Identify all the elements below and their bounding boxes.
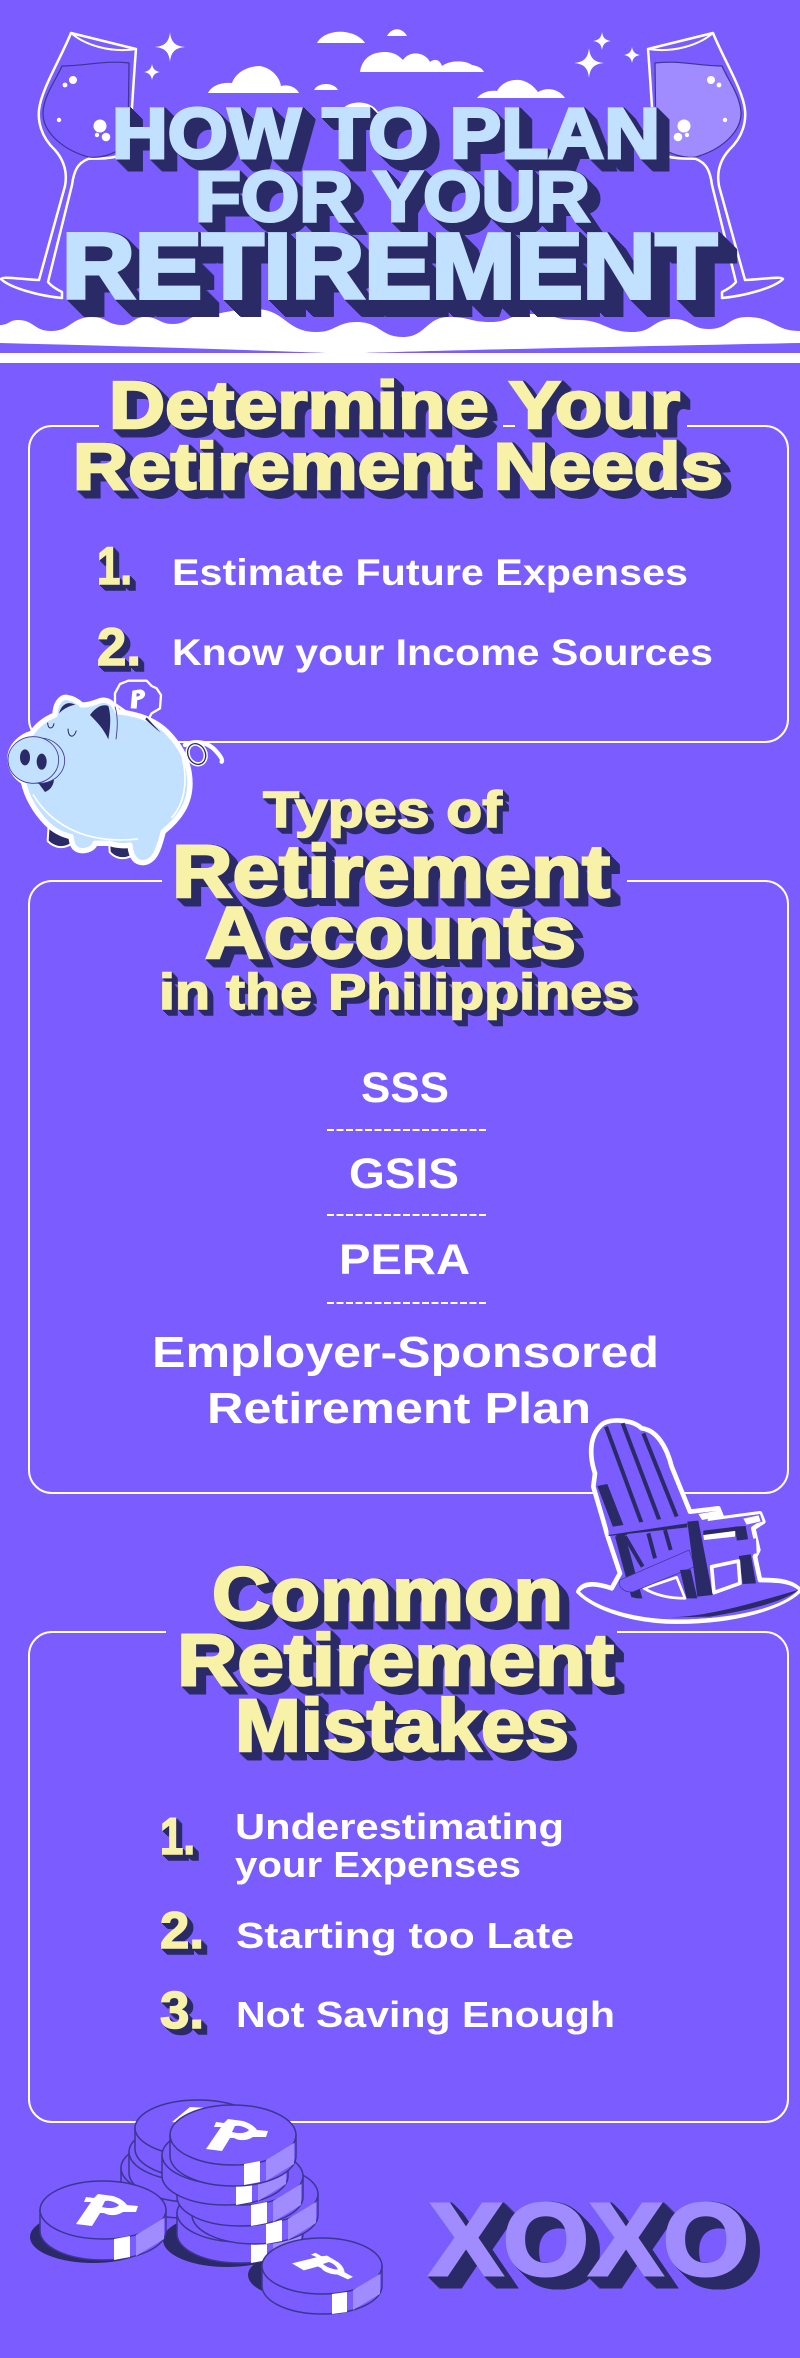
panel outline xyxy=(29,1632,788,2122)
heading xyxy=(159,781,634,1020)
list: account types: Retirement Plan xyxy=(207,1384,591,1433)
item 1 xyxy=(97,537,688,596)
icon: clouds xyxy=(208,29,565,116)
item 2 xyxy=(97,618,713,677)
icon: peso coin pile xyxy=(30,2100,382,2314)
panel: types of retirement accounts xyxy=(29,781,788,1493)
heading: Retirement xyxy=(177,1620,614,1701)
title: FOR YOUR xyxy=(195,158,590,237)
item 1 xyxy=(160,1806,564,1885)
heading: in the Philippines xyxy=(159,964,634,1020)
title: RETIREMENT xyxy=(62,214,717,318)
item 2: Starting too Late xyxy=(236,1915,574,1956)
title xyxy=(62,95,717,318)
list: account types: GSIS xyxy=(349,1150,459,1198)
heading: Common xyxy=(212,1552,563,1636)
list: account types: SSS xyxy=(361,1064,449,1112)
stacked coins xyxy=(177,2184,303,2263)
xoxo sign-off: XOXO xyxy=(429,2182,749,2297)
item 3 xyxy=(160,1982,615,2040)
item 1: 1. xyxy=(160,1808,195,1866)
top coin xyxy=(170,2105,296,2186)
icon: piggy bank xyxy=(8,681,222,863)
panel: common retirement mistakes xyxy=(29,1552,788,2122)
icon: rocking chair xyxy=(578,1421,800,1622)
heading xyxy=(73,368,723,503)
heading: Mistakes xyxy=(235,1684,569,1767)
heading xyxy=(177,1552,614,1767)
panel: determine your retirement needs xyxy=(29,368,788,742)
item 1: 1. xyxy=(97,537,132,596)
item 1: Underestimating xyxy=(235,1806,564,1847)
list: account types xyxy=(152,1064,659,1433)
list: account types: Employer-Sponsored xyxy=(152,1328,659,1377)
item 2 xyxy=(160,1902,574,1960)
front coin xyxy=(262,2238,382,2314)
heading: Accounts xyxy=(205,893,576,974)
item 3: 3. xyxy=(160,1982,204,2040)
panel outline xyxy=(29,881,788,1493)
item 2: 2. xyxy=(160,1902,204,1960)
heading: Types of xyxy=(263,781,503,838)
left coin xyxy=(40,2181,166,2260)
icon: right wine glass xyxy=(648,33,783,298)
heading: Determine Your xyxy=(109,368,680,443)
item 2: Know your Income Sources xyxy=(172,632,713,673)
item 3: Not Saving Enough xyxy=(236,1994,615,2035)
item 2: 2. xyxy=(97,618,141,677)
item 1: Estimate Future Expenses xyxy=(172,552,688,593)
heading: Retirement xyxy=(172,830,610,913)
item 1: your Expenses xyxy=(235,1844,521,1885)
back coins xyxy=(121,2100,261,2218)
heading: Retirement Needs xyxy=(73,429,723,503)
wave band and stripe xyxy=(0,309,800,363)
title: HOW TO PLAN xyxy=(112,95,660,174)
icon: left wine glass xyxy=(1,33,136,298)
icon: sparkles xyxy=(144,32,640,80)
list: account types: PERA xyxy=(339,1236,470,1284)
panel outline xyxy=(29,426,788,742)
